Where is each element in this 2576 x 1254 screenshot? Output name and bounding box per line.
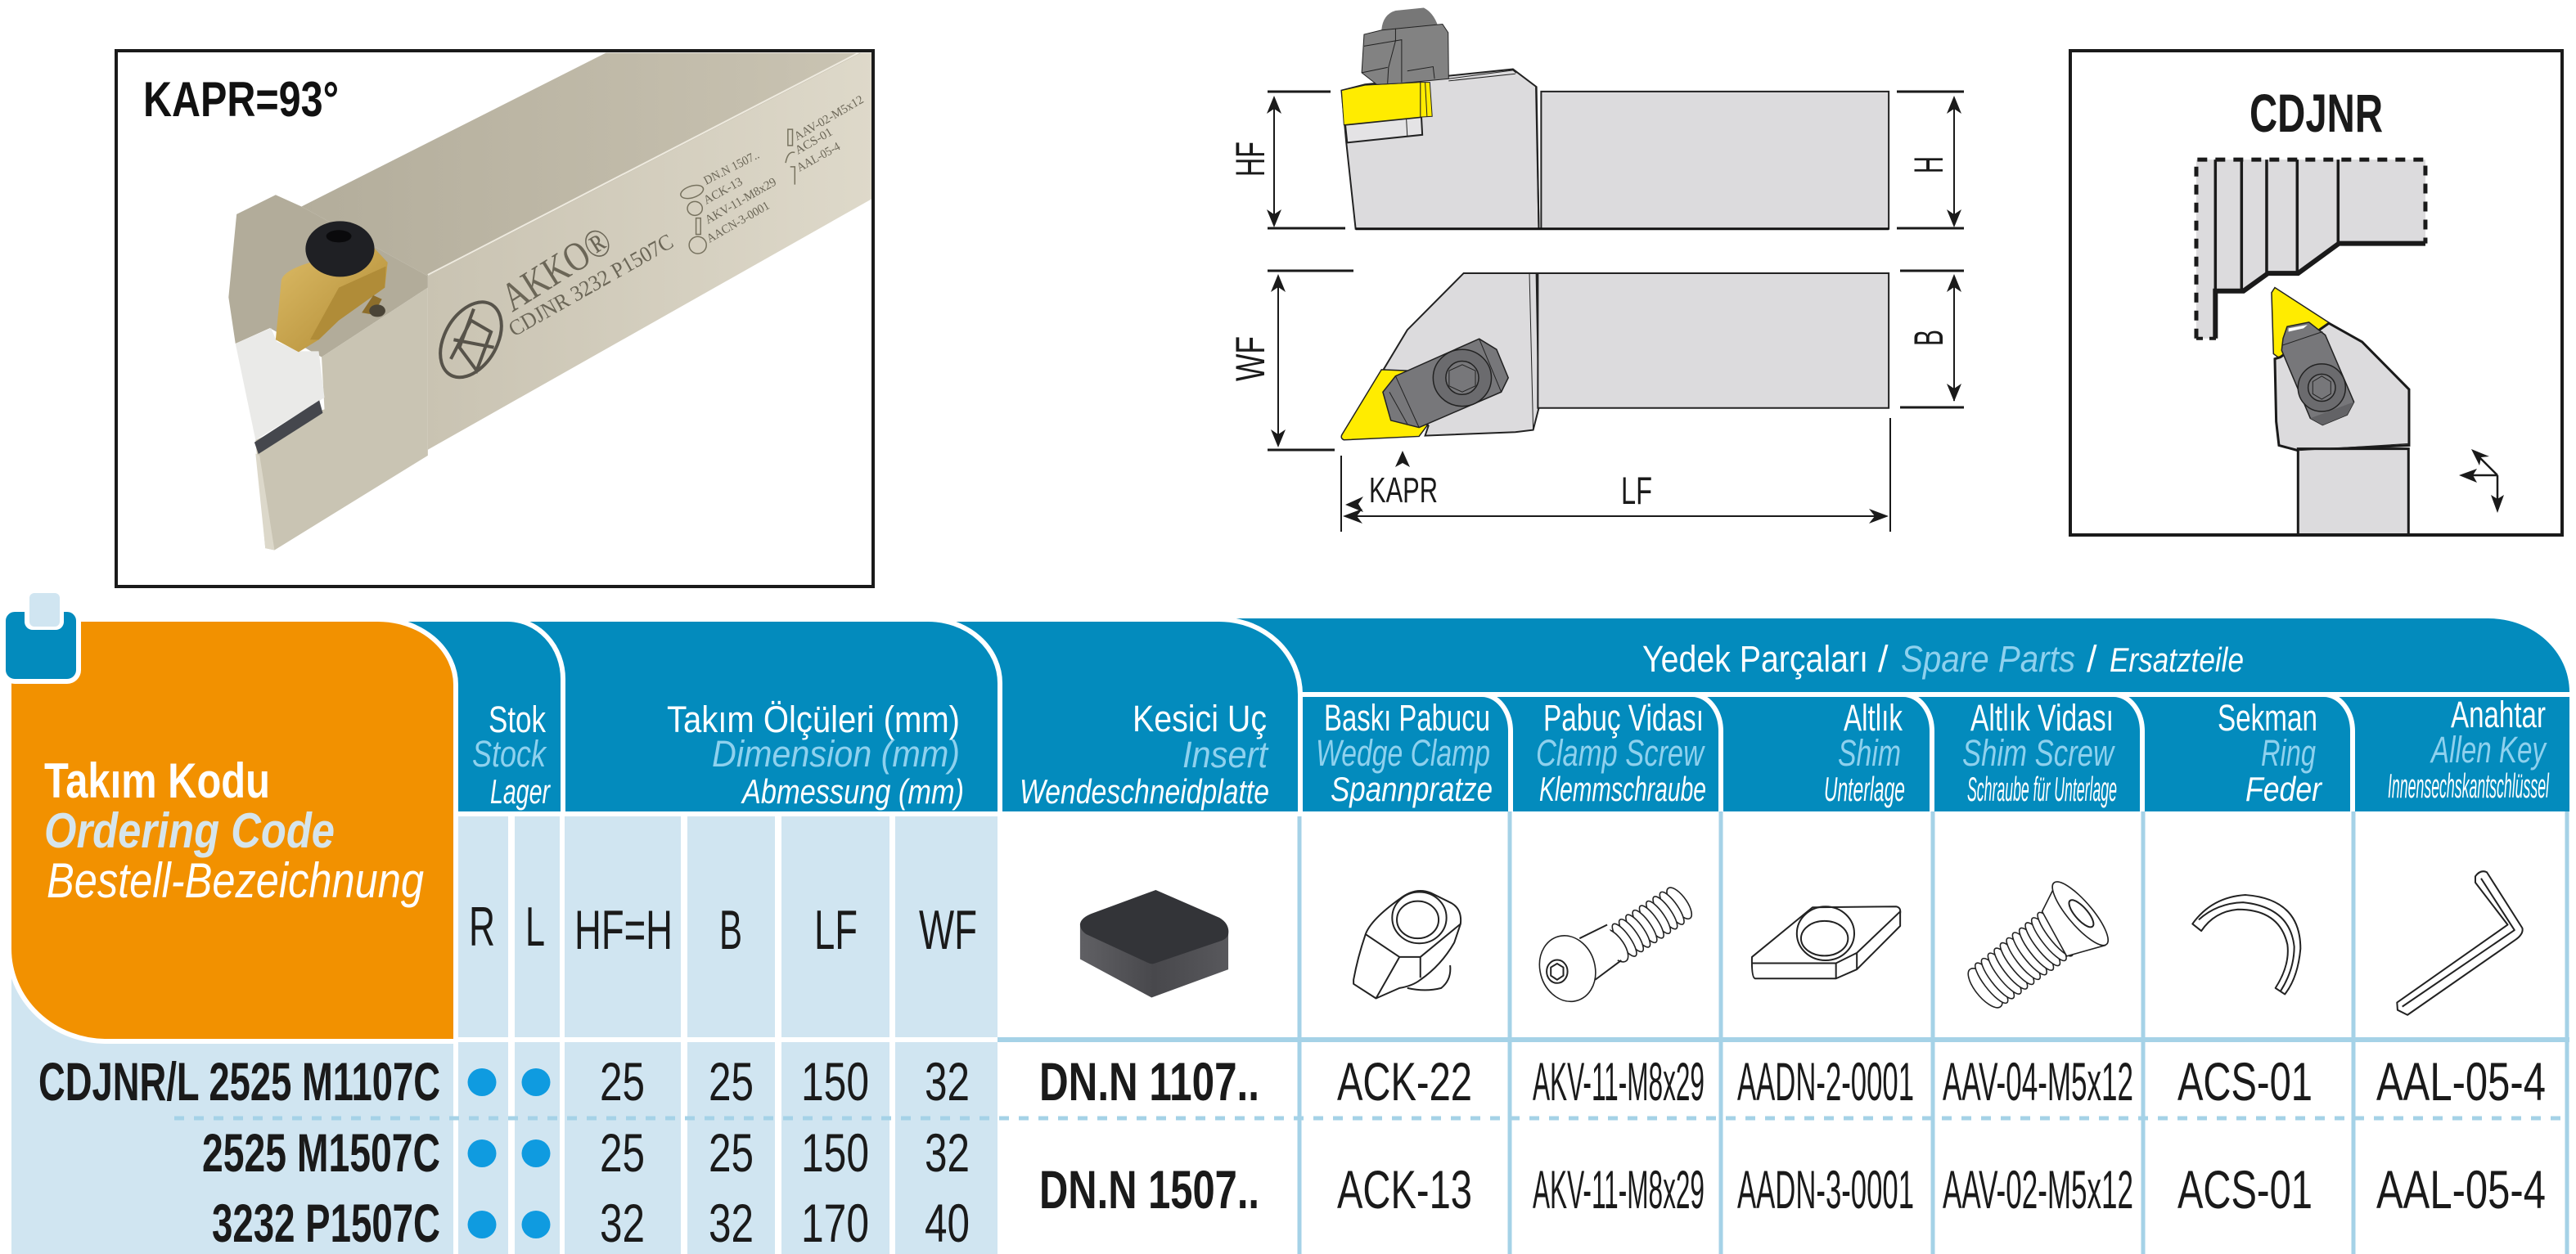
- photo engraving: tool code: CDJNR 3232 P1507C: [504, 229, 678, 341]
- dimension label: B: B: [1906, 330, 1952, 346]
- column symbols: [469, 896, 977, 961]
- column head: clamp screw: Clamp Screw: [1536, 732, 1705, 774]
- technical drawing: dimensions: [1227, 8, 1964, 532]
- column head: clamp screw: Pabuç Vidası: [1543, 697, 1704, 739]
- row 2: 2525 M1507C: 25: [709, 1122, 754, 1183]
- column head: shim screw: [1962, 694, 2142, 811]
- row 3: 3232 P1507C: 170: [801, 1193, 869, 1253]
- row 3: 3232 P1507C: 40: [925, 1193, 970, 1253]
- header text: spare parts title: /: [1878, 638, 1889, 680]
- column symbols: HF=H: [574, 899, 673, 961]
- column symbols: L: [525, 896, 545, 958]
- row 1: CDJNR/L 2525 M1107C: [38, 1051, 970, 1112]
- header: ordering code: Bestell-Bezeichnung: [47, 853, 424, 908]
- parts row: DN.N 1107 set: AADN-2-0001: [1737, 1051, 1914, 1112]
- header: spare part columns: Schraube für Unterlage: [1967, 770, 2117, 808]
- row 2: 2525 M1507C: [202, 1122, 970, 1183]
- header: stock: [393, 619, 563, 814]
- icon: allen key: [2397, 871, 2523, 1015]
- photo engraving: part list: AACN-3-0001: [705, 200, 772, 245]
- column head: wedge clamp: Wedge Clamp: [1316, 732, 1490, 774]
- parts row: DN.N 1507 set: [1039, 1159, 2546, 1220]
- icon: insert: [1080, 890, 1228, 997]
- photo engraving: part list: ACK-13: [701, 175, 745, 207]
- header text: spare parts title: Ersatzteile: [2110, 640, 2244, 679]
- row 2: 2525 M1507C: 150: [801, 1122, 869, 1183]
- parts row: DN.N 1507 set: ACS-01: [2177, 1159, 2313, 1220]
- row 2: 2525 M1507C: 25: [600, 1122, 645, 1183]
- column symbols: R: [469, 896, 495, 958]
- dimension label: KAPR: KAPR: [1369, 470, 1438, 510]
- table: [3, 589, 2569, 1254]
- header: ordering code: Takım Kodu: [44, 753, 270, 808]
- row 1: CDJNR/L 2525 M1107C: CDJNR/L 2525 M1107C: [38, 1051, 440, 1112]
- row 1: CDJNR/L 2525 M1107C: 25: [709, 1051, 754, 1112]
- parts row: DN.N 1507 set: AAV-02-M5x12: [1943, 1159, 2133, 1220]
- diagram label: CDJNR: CDJNR: [2249, 83, 2383, 143]
- dimension label: H: H: [1906, 156, 1952, 173]
- column symbols: B: [719, 899, 742, 961]
- column head: wedge clamp: [1316, 694, 1511, 811]
- column head: clamp screw: [1536, 694, 1721, 811]
- icon: shim: [1752, 906, 1900, 978]
- parts row: DN.N 1507 set: ACK-13: [1337, 1159, 1472, 1220]
- column head: shim: Unterlage: [1824, 770, 1905, 808]
- header: dimensions: [524, 619, 1000, 814]
- header: stock: Lager: [490, 772, 551, 811]
- parts row: DN.N 1107 set: [1039, 1051, 2546, 1112]
- column head: wedge clamp: Baskı Pabucu: [1324, 697, 1490, 739]
- column head: ring: Feder: [2245, 770, 2323, 808]
- column head: ring: [2218, 694, 2353, 811]
- header: insert: Kesici Uç: [1133, 698, 1267, 739]
- parts row: DN.N 1107 set: AAV-04-M5x12: [1943, 1051, 2133, 1112]
- dimension label: HF: HF: [1227, 142, 1273, 177]
- header text: spare parts title: /: [2087, 638, 2097, 680]
- parts row: DN.N 1107 set: DN.N 1107..: [1039, 1051, 1259, 1112]
- header: stock: Stock: [472, 733, 547, 775]
- column symbols: WF: [919, 899, 977, 961]
- parts row: DN.N 1107 set: ACS-01: [2177, 1051, 2313, 1112]
- column symbols: LF: [814, 899, 858, 961]
- header text: spare parts title: Spare Parts: [1901, 638, 2075, 680]
- row 2: 2525 M1507C: 32: [925, 1122, 970, 1183]
- row 3: 3232 P1507C: [212, 1193, 970, 1253]
- column head: shim: Shim: [1838, 732, 1901, 774]
- panel: product photo: [116, 51, 896, 587]
- row 3: 3232 P1507C: 3232 P1507C: [212, 1193, 440, 1253]
- photo engraving: part list: [701, 93, 866, 245]
- parts row: DN.N 1507 set: AKV-11-M8x29: [1533, 1159, 1705, 1220]
- column head: shim screw: Altlık Vidası: [1970, 697, 2114, 739]
- dimension lines and arrows: [1267, 92, 1964, 532]
- photo engraving: part list: DN.N 1507..: [702, 149, 762, 188]
- photo engraving: part list: ACS-01: [793, 126, 835, 157]
- header text: spare parts title: Yedek Parçaları: [1642, 638, 1868, 680]
- parts row: DN.N 1507 set: AADN-3-0001: [1737, 1159, 1914, 1220]
- column head: ring: Ring: [2261, 732, 2316, 774]
- photo engraving: part list: AAL-05-4: [795, 140, 843, 174]
- header: ordering code: Ordering Code: [44, 803, 335, 858]
- header: ordering code: [9, 619, 456, 1041]
- row 1: CDJNR/L 2525 M1107C: 25: [600, 1051, 645, 1112]
- header: dimensions: Takım Ölçüleri (mm): [667, 699, 960, 740]
- header: insert: Wendeschneidplatte: [1020, 772, 1269, 811]
- header: insert: Insert: [1182, 734, 1269, 775]
- column head: allen key: Anahtar: [2451, 694, 2546, 735]
- dimension label: LF: LF: [1621, 469, 1652, 512]
- row 1: CDJNR/L 2525 M1107C: 150: [801, 1051, 869, 1112]
- header: insert: [900, 619, 1300, 814]
- column head: shim screw: Shim Screw: [1962, 732, 2115, 774]
- icon: clamp screw: [1534, 885, 1696, 1005]
- row 3: 3232 P1507C: 32: [600, 1193, 645, 1253]
- column head: wedge clamp: Spannpratze: [1331, 770, 1493, 808]
- icon: shim screw: [1961, 877, 2117, 1011]
- header: dimensions: Abmessung (mm): [741, 772, 964, 811]
- header: stock: Stok: [489, 699, 546, 740]
- header: spare part columns: [1303, 694, 2569, 811]
- column head: shim: Altlık: [1844, 697, 1903, 739]
- icon: wedge clamp: [1353, 891, 1461, 999]
- row 3: 3232 P1507C: 32: [709, 1193, 754, 1253]
- column head: clamp screw: Klemmschraube: [1539, 770, 1706, 808]
- column head: ring: Sekman: [2218, 697, 2317, 739]
- drawing: side view: [1341, 8, 1889, 229]
- photo engraving: part list: AAV-02-M5x12: [792, 93, 866, 143]
- panel: CDJNR operation diagram: [2070, 51, 2562, 539]
- icon: ring: [2192, 895, 2300, 994]
- parts row: DN.N 1507 set: DN.N 1507..: [1039, 1159, 1259, 1220]
- table: row body cells: [11, 810, 2569, 1254]
- photo engraving: part list: AKV-11-M8x29: [703, 176, 779, 227]
- parts row: DN.N 1107 set: ACK-22: [1337, 1051, 1472, 1112]
- header: dimensions: Dimension (mm): [712, 733, 960, 775]
- parts row: DN.N 1107 set: AKV-11-M8x29: [1533, 1051, 1705, 1112]
- photo label: KAPR: KAPR=93°: [143, 72, 339, 127]
- photo engraving: brand: AKKO®: [493, 217, 619, 320]
- icon: feed direction arrows: [2459, 449, 2504, 513]
- column head: shim: [1824, 694, 1932, 811]
- column head: allen key: [2388, 694, 2550, 805]
- row 2: 2525 M1507C: 2525 M1507C: [202, 1122, 440, 1183]
- icon: corner tab: [3, 589, 79, 681]
- drawing: top view: [1341, 273, 1889, 440]
- dimension label: WF: WF: [1227, 336, 1273, 381]
- header text: spare parts title: [1642, 638, 2244, 680]
- header: spare parts band: [1211, 618, 2569, 692]
- row 1: CDJNR/L 2525 M1107C: 32: [925, 1051, 970, 1112]
